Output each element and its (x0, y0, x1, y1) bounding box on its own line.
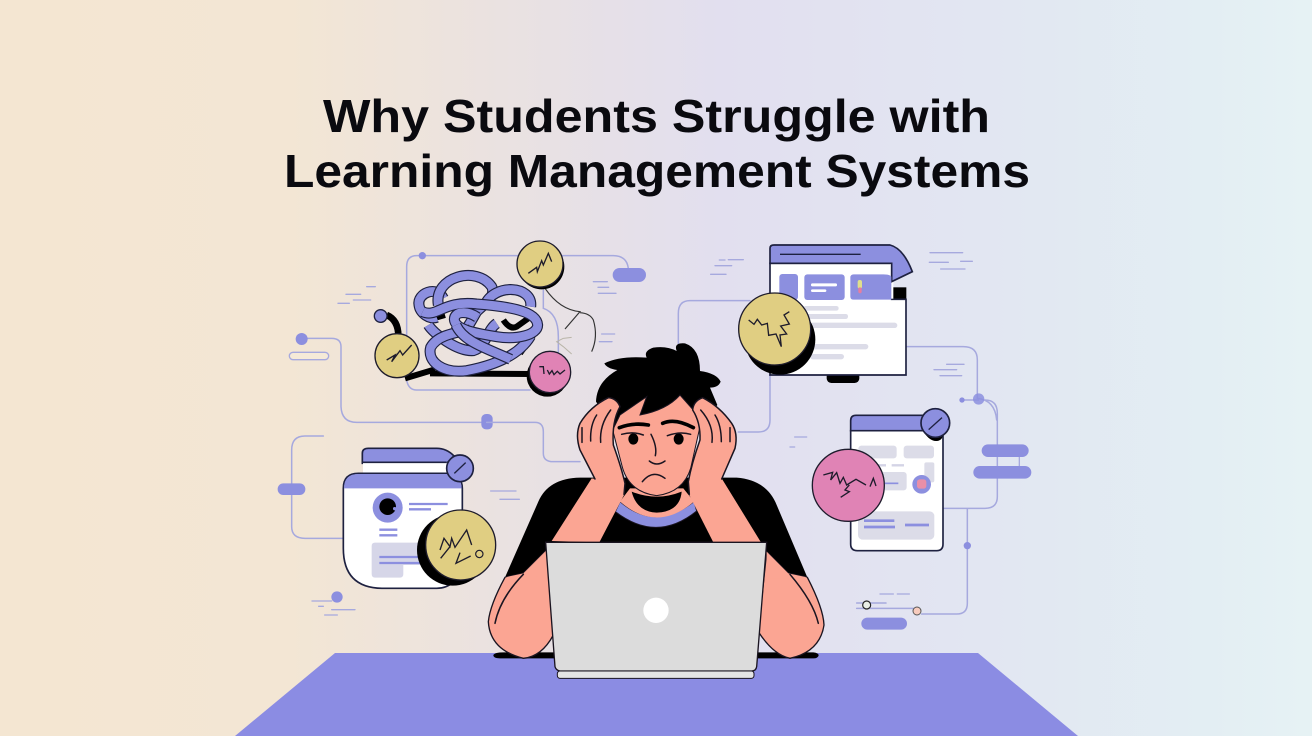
card tab (362, 448, 454, 463)
card body (343, 473, 462, 588)
laptop (546, 542, 767, 678)
connector node (481, 414, 493, 429)
right arm (758, 552, 824, 658)
coin: yellow left (375, 334, 419, 378)
illustration: tangled knot with warning coins (289, 241, 646, 429)
right hand (688, 398, 736, 495)
brows (619, 424, 648, 428)
card body (851, 431, 943, 551)
forearm right (688, 478, 761, 542)
person at laptop (487, 343, 824, 678)
coin: yellow (739, 293, 815, 375)
slash badge (921, 409, 950, 441)
tangled knot (419, 275, 538, 371)
node cluster (959, 393, 984, 405)
title (284, 90, 1030, 197)
window body (770, 263, 906, 375)
left hand (577, 398, 625, 495)
avatar (373, 493, 403, 523)
face badge (912, 475, 931, 494)
connector dot (964, 542, 971, 549)
small nodes (863, 601, 921, 615)
lower panel (858, 511, 934, 540)
illustration: profile card (278, 436, 519, 615)
slash badge (447, 455, 473, 482)
bottom pill (861, 618, 907, 630)
illustration: course page (790, 400, 1031, 630)
title: Why Students Struggle with (323, 90, 990, 142)
connector behind person (487, 422, 580, 462)
coin: pink (812, 449, 884, 521)
tiles (779, 274, 891, 300)
window header (770, 245, 912, 282)
grey panel (372, 543, 423, 578)
coin: yellow (417, 510, 496, 586)
illustration: dashboard window (678, 245, 997, 432)
coin: pink (527, 351, 571, 397)
node dot (296, 333, 308, 345)
title: Learning Management Systems (284, 145, 1030, 197)
window foot (827, 372, 859, 383)
node dot (331, 591, 343, 603)
left arm (488, 548, 553, 658)
nose and mouth (642, 434, 665, 482)
collar (615, 502, 697, 527)
neck (620, 488, 694, 517)
table shadows (493, 652, 819, 658)
coin: yellow top (517, 241, 564, 289)
forearm left (552, 478, 624, 542)
table (235, 653, 1078, 736)
face (613, 395, 700, 496)
knot shadow strokes (405, 315, 533, 378)
hair back (596, 343, 721, 428)
pill (278, 483, 305, 495)
right pills (973, 444, 1031, 479)
pill (613, 268, 646, 282)
shirt (505, 478, 807, 602)
eyes (622, 433, 691, 445)
outlined pill (289, 352, 329, 360)
card header (851, 415, 930, 431)
window tab (892, 287, 906, 301)
